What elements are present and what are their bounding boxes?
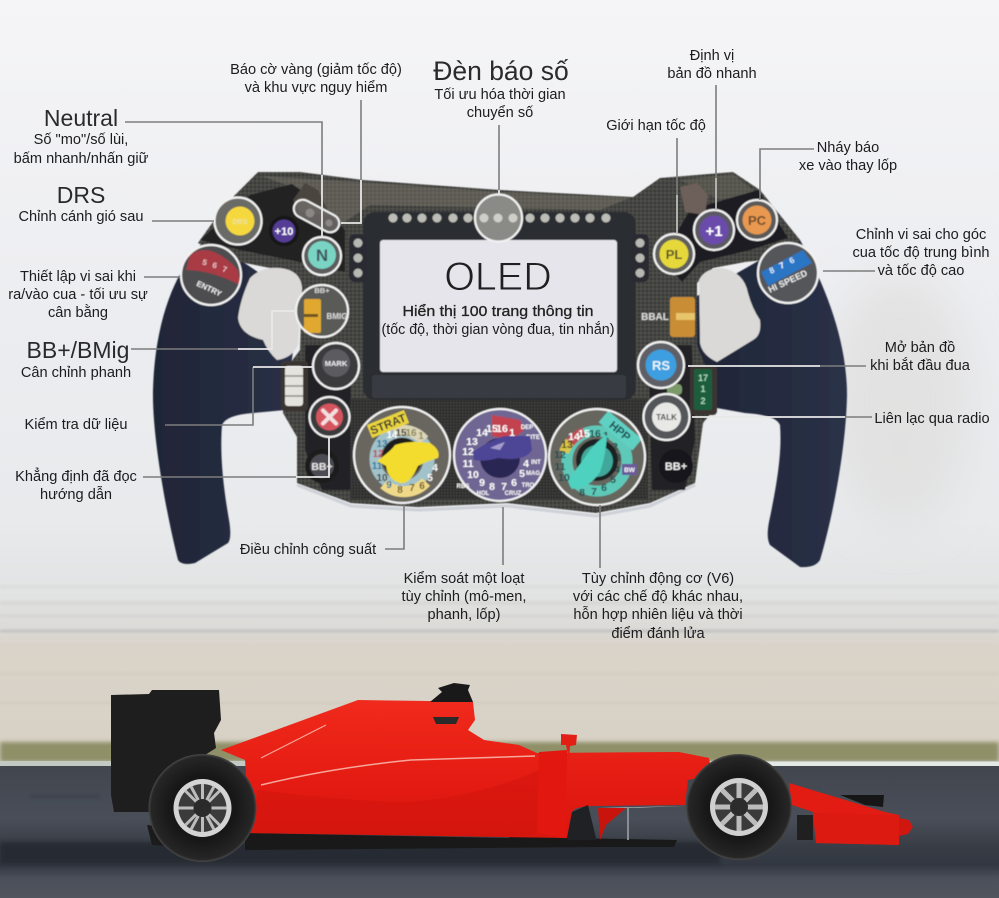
callout: Kiểm tra dữ liệu xyxy=(24,367,313,433)
paddle right xyxy=(680,183,708,215)
rotary: BB+/BMig: BB+ xyxy=(314,286,330,295)
sidepod panel xyxy=(537,750,567,838)
hole left xyxy=(238,268,302,360)
callout: Thiết lập vi sai: Thiết lập vi sai khi xyxy=(20,269,136,285)
callout: Kiểm soát một loạt: tùy chỉnh (mô-men, xyxy=(402,589,526,605)
airbox intake xyxy=(430,683,473,702)
shift lights strip xyxy=(388,214,610,222)
button: +10: +10 xyxy=(275,226,293,238)
hole right xyxy=(699,268,760,362)
callout: Neutral: bấm nhanh/nhấn giữ xyxy=(14,151,149,167)
callout: DRS: Chỉnh cánh gió sau xyxy=(19,209,143,225)
carbon sheen xyxy=(262,176,630,225)
dial: purple multi-function: HOL xyxy=(477,491,490,497)
dial: STRAT: 10 xyxy=(376,473,388,484)
dial: purple multi-function: 6 xyxy=(511,477,517,489)
dial: purple multi-function: 10 xyxy=(467,469,479,481)
lower carbon mesh panel xyxy=(350,398,648,500)
screen bezel xyxy=(363,212,636,400)
paddle left xyxy=(293,183,330,215)
callout: Neutral: Neutral xyxy=(44,105,118,131)
callout: Chỉnh vi sai: Chỉnh vi sai cho góc xyxy=(856,227,986,243)
rotary: BB+/BMig: BMIG xyxy=(327,312,347,321)
callout: DRS: DRS xyxy=(57,182,105,208)
silver lower lip xyxy=(297,485,695,516)
callout: Kiểm soát một loạt: Kiểm soát một loạt xyxy=(404,571,524,587)
right green wheel: 17 xyxy=(698,373,708,383)
callout: Điều chỉnh công suất: Điều chỉnh công suất xyxy=(240,542,376,558)
callout: Giới hạn tốc độ: Giới hạn tốc độ xyxy=(606,118,706,134)
dial: HPP: 2 xyxy=(612,441,618,453)
front wheel xyxy=(686,754,792,860)
strut xyxy=(627,808,629,840)
button: BB+ left xyxy=(305,449,339,483)
button: RS xyxy=(638,342,684,388)
dial: HPP: 16 xyxy=(589,428,601,440)
dial: STRAT: 13 xyxy=(376,439,388,450)
callout: Nháy báo xyxy=(760,140,897,200)
mirror xyxy=(561,734,577,760)
callout: Điều chỉnh công suất xyxy=(240,504,404,558)
dial: purple multi-function: DEP xyxy=(521,425,533,431)
callout: BB+/BMig xyxy=(21,311,296,381)
BW tag: BW xyxy=(624,467,636,474)
dial: purple multi-function: 12 xyxy=(462,446,474,458)
rotary: ENTRY: 7 xyxy=(221,265,228,275)
callout: Tùy chỉnh động cơ: với các chế độ khác nhau, xyxy=(573,589,743,605)
button: RS: RS xyxy=(652,358,670,373)
dial: purple multi-function: 13 xyxy=(466,436,478,448)
dial: HPP: 8 xyxy=(579,487,585,499)
callout: Mở bản đồ: khi bắt đầu đua xyxy=(870,357,971,374)
right LED column xyxy=(631,234,649,282)
rotary: HI SPEED: 7 xyxy=(777,260,786,271)
button: +10 xyxy=(269,216,299,246)
dial: purple multi-function: 8 xyxy=(489,481,495,493)
callout: Báo cờ vàng xyxy=(230,62,402,223)
left LED column xyxy=(349,234,367,282)
button: BB+ right: BB+ xyxy=(665,461,687,473)
dial: HPP: 5 xyxy=(610,474,616,486)
callout: Giới hạn tốc độ xyxy=(606,118,706,234)
callout: Khẳng định đã đọc: Khẳng định đã đọc xyxy=(15,467,137,485)
dial: HPP: 4 xyxy=(614,464,620,476)
dial knob xyxy=(382,438,422,478)
dial: purple multi-function: RBS xyxy=(457,484,469,490)
dial: HPP: 1 xyxy=(603,430,609,442)
dial: STRAT: 1 xyxy=(418,431,424,442)
dial: STRAT: 14 xyxy=(386,430,398,441)
rotary: ENTRY: ENTRY xyxy=(195,279,224,299)
dial: STRAT: 8 xyxy=(397,485,403,496)
rotary: HI SPEED xyxy=(758,243,818,303)
HPP label: HPP xyxy=(606,420,633,444)
dial ring xyxy=(375,432,429,486)
dial: purple multi-function: 5 xyxy=(519,468,525,480)
dial: STRAT: 7 xyxy=(409,483,415,494)
left hand grip xyxy=(153,240,300,564)
callout: Đèn báo số xyxy=(433,56,569,195)
button: neutral pill xyxy=(291,197,342,235)
button: shift lens xyxy=(475,194,522,242)
dial: HPP xyxy=(549,409,645,505)
dial: purple multi-function: CRUZ xyxy=(505,491,522,497)
button: TALK: TALK xyxy=(656,413,677,422)
button: BB+ right xyxy=(659,449,693,483)
callout: Báo cờ vàng: và khu vực nguy hiểm xyxy=(245,80,387,96)
button: N: N xyxy=(316,246,328,265)
rear wing xyxy=(111,690,221,812)
dial: STRAT: 6 xyxy=(419,481,425,492)
dial: purple multi-function: 9 xyxy=(479,477,485,489)
front wing tip xyxy=(899,818,913,836)
dial: HPP: 10 xyxy=(558,472,570,484)
dial: purple multi-function: 14 xyxy=(476,427,488,439)
steering wheel xyxy=(153,172,847,567)
right green wheel xyxy=(690,365,717,415)
callout: Định vị bản đồ nhanh xyxy=(667,48,757,210)
dial: purple multi-function: 7 xyxy=(501,481,507,493)
callout: Nháy báo: Nháy báo xyxy=(817,140,879,156)
lower side columns xyxy=(305,345,352,490)
callout: Kiểm tra dữ liệu: Kiểm tra dữ liệu xyxy=(24,417,128,433)
carbon body xyxy=(198,172,800,513)
body xyxy=(221,700,712,838)
dial: purple multi-function: BITE xyxy=(526,435,540,441)
dial knob xyxy=(576,439,618,481)
text: display description: Hiển thị 100 trang thông tin xyxy=(402,303,594,320)
dial: purple multi-function: 15 xyxy=(486,423,498,435)
dial: purple multi-function: MAG xyxy=(526,471,540,477)
dial: HPP: 7 xyxy=(591,486,597,498)
text: display detail: (tốc độ, thời gian vòng đua, tin nhắn) xyxy=(382,321,614,338)
button: DRS: DRS xyxy=(233,219,248,226)
dial: purple multi-function: 4 xyxy=(523,458,529,470)
rear wheel xyxy=(148,754,256,862)
right green wheel: 2 xyxy=(700,396,706,406)
left white scroll wheel xyxy=(281,361,308,411)
red F1 car xyxy=(111,683,913,862)
callout: Khẳng định đã đọc xyxy=(15,437,329,503)
button: cancel X xyxy=(310,397,350,437)
callout: Chỉnh vi sai: cua tốc độ trung bình xyxy=(852,245,990,261)
button: DRS xyxy=(214,198,262,244)
dial: purple multi-function: TRQ xyxy=(522,483,535,489)
callout: Kiểm soát một loạt: phanh, lốp) xyxy=(427,607,501,623)
callout: Neutral xyxy=(14,105,322,237)
dial: purple multi-function xyxy=(454,409,546,501)
button: PL xyxy=(654,234,694,274)
rear crash structure xyxy=(147,825,166,846)
callout: Định vị bản đồ nhanh: Định vị xyxy=(690,48,734,64)
front wing endplate xyxy=(813,813,899,845)
callout: Thiết lập vi sai xyxy=(8,269,180,321)
dial: HPP: 12 xyxy=(554,449,566,461)
dial: STRAT: 4 xyxy=(432,463,438,474)
callout: Đèn báo số: Tối ưu hóa thời gian xyxy=(434,87,566,103)
dial: STRAT: 12 xyxy=(372,449,384,460)
STRAT label: STRAT xyxy=(369,412,408,438)
rotary: HI SPEED: 8 xyxy=(767,265,776,276)
callout: Liên lạc qua radio: Liên lạc qua radio xyxy=(874,411,990,427)
callout: Chỉnh vi sai xyxy=(823,227,990,279)
black bargeboard xyxy=(567,805,596,840)
dial: STRAT: 11 xyxy=(372,461,383,472)
callout: Mở bản đồ: Mở bản đồ xyxy=(885,340,955,356)
rotary: ENTRY: 6 xyxy=(211,261,218,271)
rotary: HI SPEED: HI SPEED xyxy=(767,268,809,295)
dial: STRAT xyxy=(354,407,450,503)
callout: Thiết lập vi sai: ra/vào cua - tối ưu sự xyxy=(8,287,148,303)
callout: Kiểm soát một loạt xyxy=(402,507,526,623)
dial: purple multi-function: 11 xyxy=(462,458,474,470)
heading: OLED: OLED xyxy=(444,255,552,299)
callout: Tùy chỉnh động cơ: điểm đánh lửa xyxy=(611,626,706,642)
button: TALK xyxy=(644,394,690,440)
dial: purple multi-function: 16 xyxy=(496,423,508,435)
callout: BB+/BMig: BB+/BMig xyxy=(27,337,129,363)
callout: Định vị bản đồ nhanh: bản đồ nhanh xyxy=(667,66,757,82)
button: BB+ left: BB+ xyxy=(311,461,333,473)
front wing pylon xyxy=(840,795,884,807)
dial: purple multi-function: INT xyxy=(531,460,541,466)
button: PC xyxy=(737,200,777,240)
body highlights xyxy=(261,756,535,785)
callout: Mở bản đồ xyxy=(688,340,971,374)
button: PL: PL xyxy=(666,247,682,262)
right green wheel: 1 xyxy=(700,384,706,394)
BBAL rotary: BBAL xyxy=(641,312,669,323)
button: +1 xyxy=(694,210,734,250)
right hand grip xyxy=(690,240,847,567)
dial: STRAT: 15 xyxy=(395,428,407,439)
cockpit headrest xyxy=(433,717,459,724)
green indicator xyxy=(667,384,682,395)
button: +1: +1 xyxy=(705,223,723,240)
callout: Chỉnh vi sai: và tốc độ cao xyxy=(878,263,964,279)
callout: Tùy chỉnh động cơ: Tùy chỉnh động cơ (V6) xyxy=(582,571,734,587)
dial: STRAT: 16 xyxy=(405,428,417,439)
dial: HPP: 6 xyxy=(601,482,607,494)
callout: BB+/BMig: Cân chỉnh phanh xyxy=(21,365,131,381)
dial: HPP: 13 xyxy=(561,439,573,451)
rotary: HI SPEED: 6 xyxy=(787,255,796,266)
rotary: ENTRY xyxy=(181,245,241,305)
wishbone xyxy=(600,806,686,808)
callout: Báo cờ vàng: Báo cờ vàng (giảm tốc độ) xyxy=(230,62,402,78)
callout: Khẳng định đã đọc: hướng dẫn xyxy=(40,486,112,503)
dial: STRAT: 9 xyxy=(386,480,392,491)
dial: HPP: 3 xyxy=(615,452,621,464)
callout: Đèn báo số: Đèn báo số xyxy=(433,56,569,86)
nose xyxy=(789,783,899,845)
dark button plate left xyxy=(200,184,345,272)
callout: Neutral: Số "mo"/số lùi, xyxy=(34,132,128,148)
dial: purple multi-function: 1 xyxy=(509,427,515,439)
lower body shade xyxy=(250,770,540,837)
rotary: BB+/BMig xyxy=(296,285,348,337)
callout: Tùy chỉnh động cơ xyxy=(573,505,743,642)
red lower wedge xyxy=(598,808,626,840)
front wing mount xyxy=(797,815,813,840)
dial knob xyxy=(480,438,520,478)
dial: HPP: 11 xyxy=(554,461,566,473)
BBAL rotary xyxy=(641,297,695,337)
dial: HPP: 15 xyxy=(578,428,590,440)
OLED display xyxy=(380,240,617,372)
floor xyxy=(245,833,677,850)
rotary: ENTRY: 5 xyxy=(201,258,208,268)
callout: Đèn báo số: chuyển số xyxy=(467,105,533,121)
button: MARK xyxy=(313,343,359,389)
callout: Nháy báo: xe vào thay lốp xyxy=(799,158,897,174)
callout: Tùy chỉnh động cơ: hỗn hợp nhiên liệu và thời xyxy=(573,606,743,623)
callout: DRS xyxy=(19,182,214,225)
dark button plate right xyxy=(662,190,788,282)
button: MARK: MARK xyxy=(325,359,348,368)
dial: HPP: 14 xyxy=(568,431,580,443)
button: N xyxy=(303,237,341,275)
dial: STRAT: 5 xyxy=(427,473,433,484)
callout: Thiết lập vi sai: cân bằng xyxy=(48,304,108,321)
button: PC: PC xyxy=(748,213,767,228)
OLED display text xyxy=(382,255,614,338)
